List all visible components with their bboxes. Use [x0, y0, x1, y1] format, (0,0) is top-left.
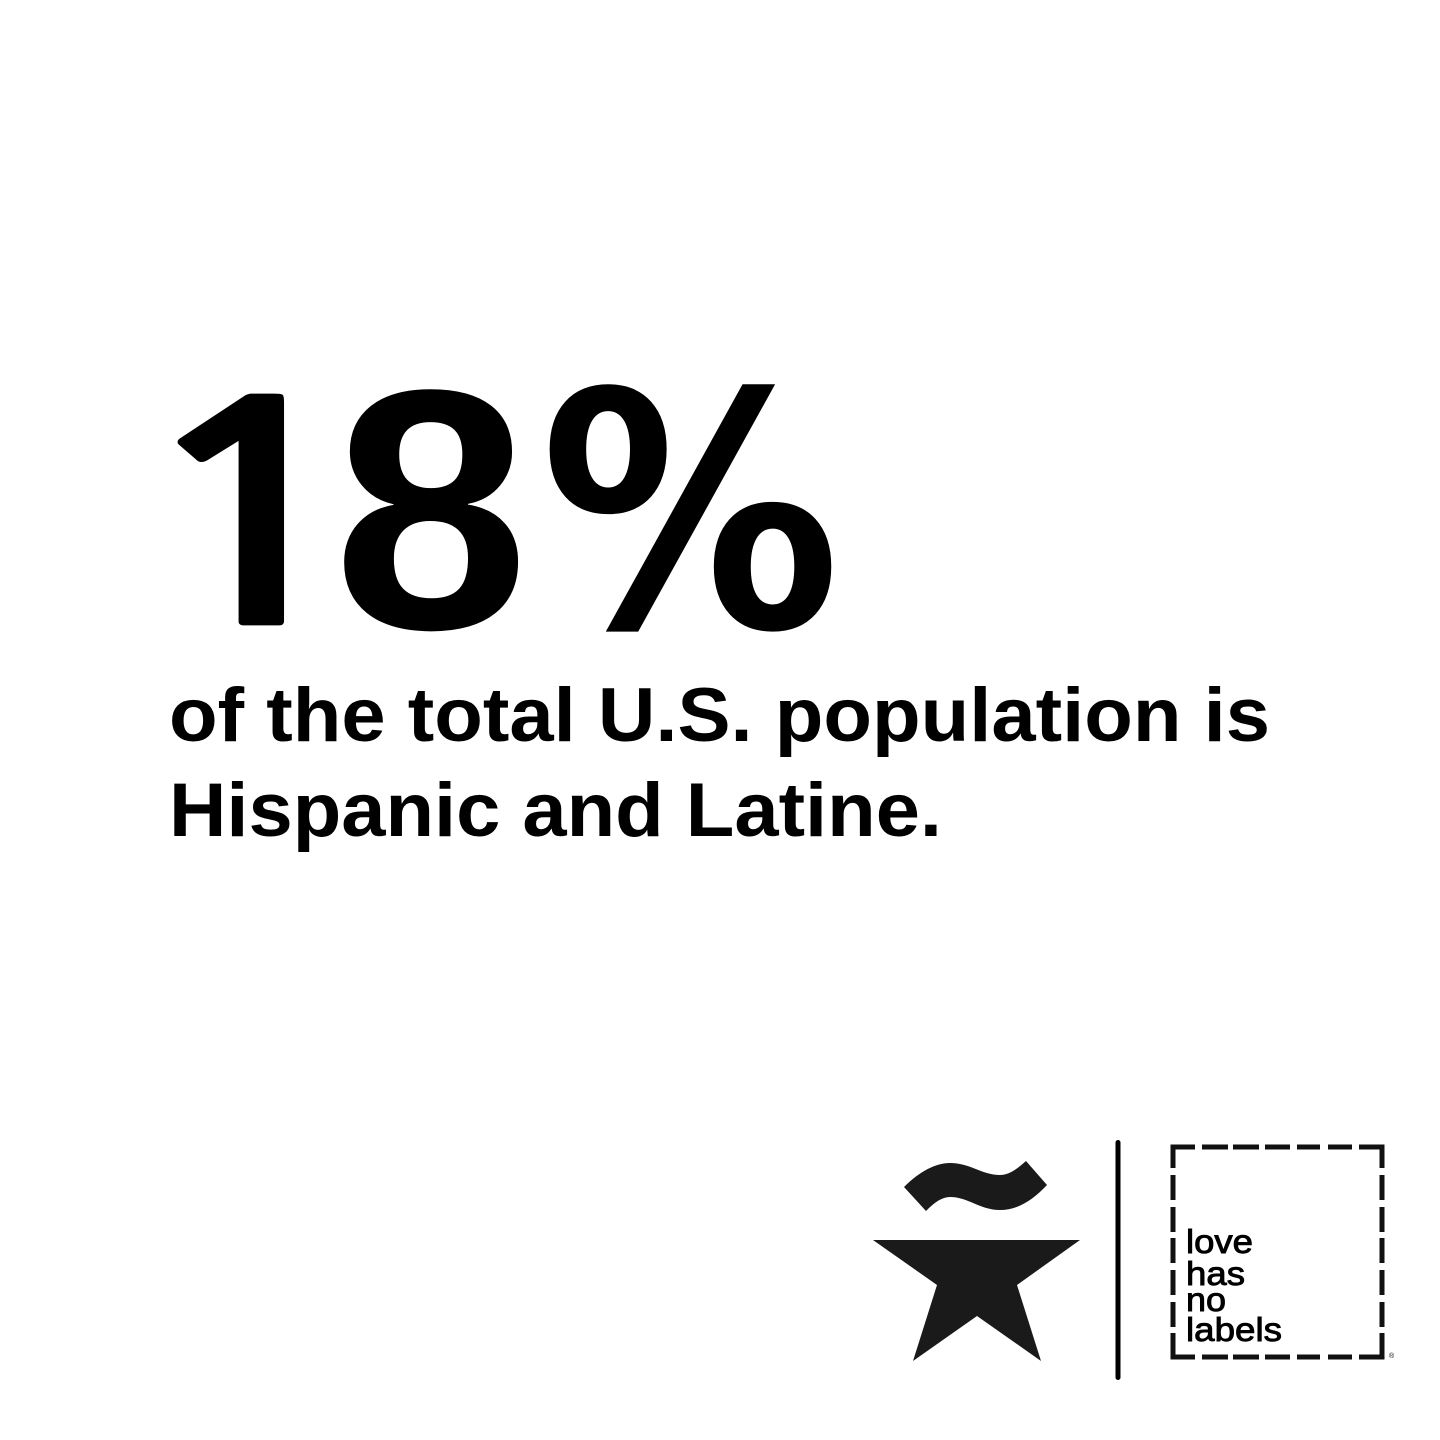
logo: love has no labels [1173, 1147, 1395, 1360]
logo wordmark: no [1186, 1281, 1226, 1318]
icon: tilde [904, 1161, 1047, 1211]
logo wordmark [1186, 1223, 1282, 1348]
statement text: of the total U.S. population is [169, 673, 1270, 758]
statement text: Hispanic and Latine. [169, 768, 942, 853]
big statistic: 18%: 1 [123, 369, 381, 671]
logo: tilde over star [873, 1161, 1080, 1361]
logo wordmark: love [1186, 1223, 1253, 1260]
logo wordmark: labels [1186, 1311, 1282, 1348]
registered mark: ® [1389, 1352, 1395, 1360]
big statistic: 18% [123, 319, 841, 705]
icon: star [873, 1240, 1080, 1361]
vertical divider [1116, 1140, 1120, 1380]
big statistic: 18%: % [540, 325, 841, 705]
logo wordmark: has [1186, 1255, 1245, 1292]
statement text [169, 673, 1270, 853]
dashed square [1173, 1147, 1382, 1357]
big statistic: 18%: 8 [333, 319, 529, 701]
